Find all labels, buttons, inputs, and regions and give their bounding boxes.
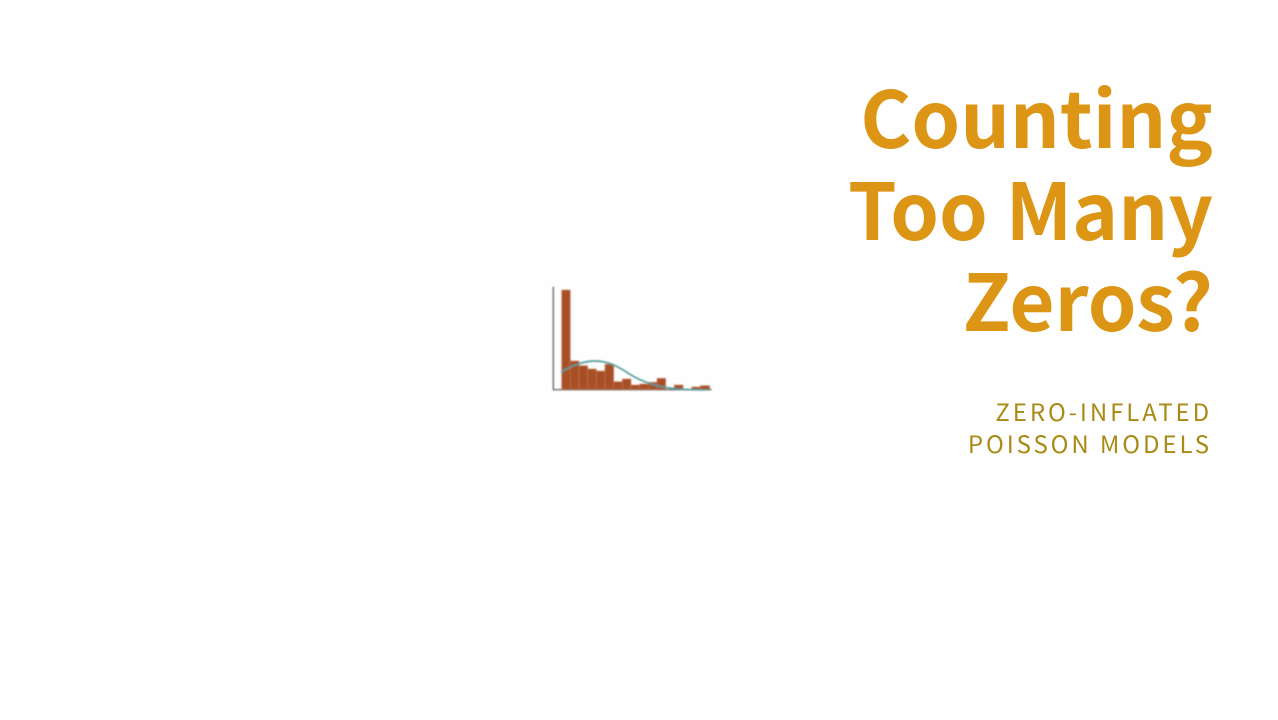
subtitle: ZERO-INFLATED	[995, 393, 1212, 428]
title: Too Many	[848, 150, 1213, 262]
title: Counting	[860, 59, 1213, 171]
title: Zeros?	[963, 242, 1213, 354]
fitted curve	[561, 361, 708, 390]
histogram bars	[562, 290, 710, 389]
chart: zero-inflated histogram	[552, 286, 712, 392]
axes	[553, 287, 712, 390]
subtitle: POISSON MODELS	[968, 425, 1212, 460]
title	[848, 59, 1213, 354]
subtitle	[968, 393, 1212, 460]
